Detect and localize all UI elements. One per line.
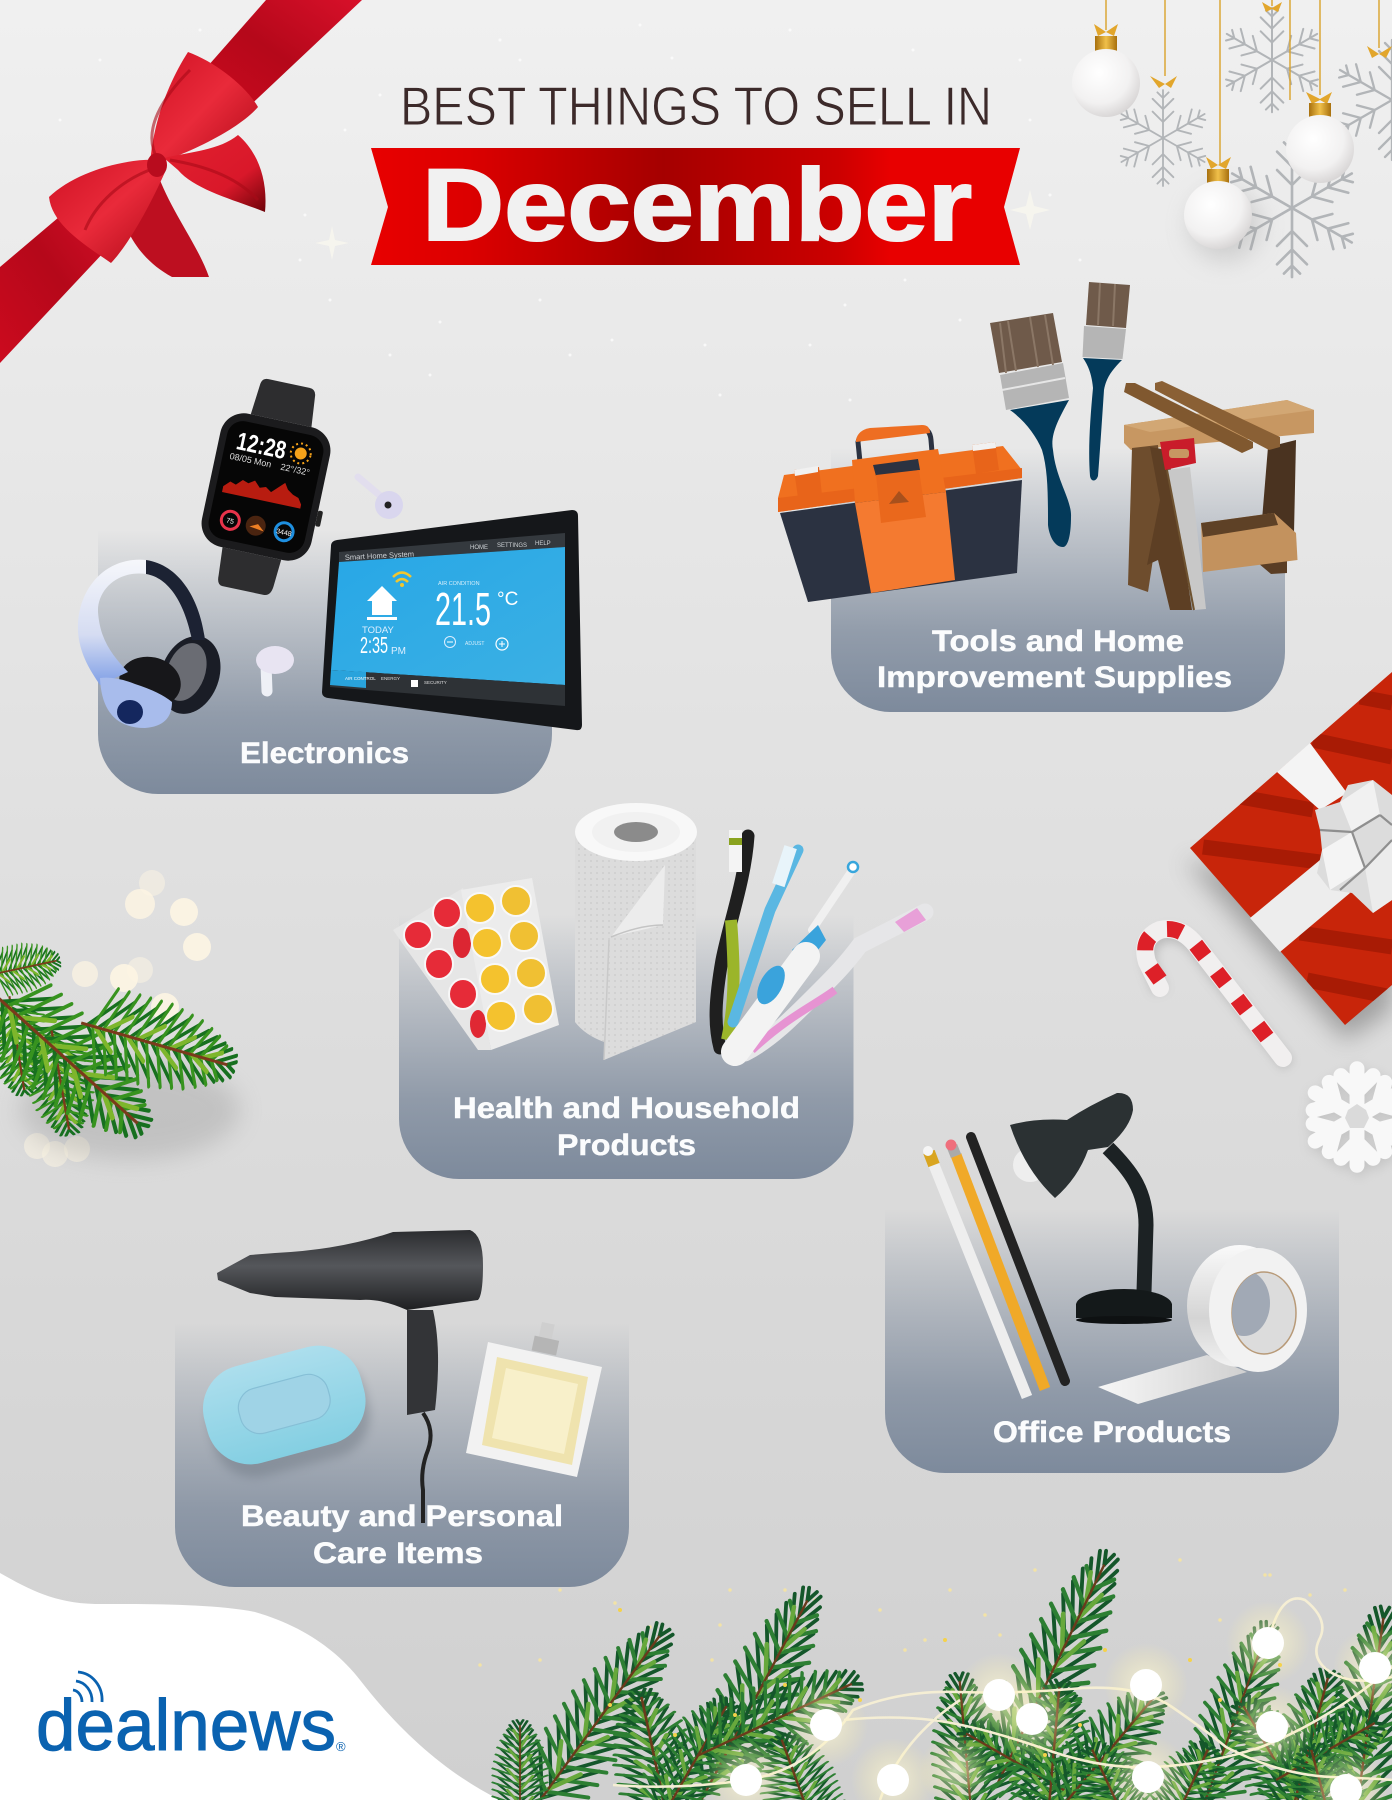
wordmark: dealnews xyxy=(36,1686,336,1766)
icon: tablet xyxy=(322,510,582,730)
brace xyxy=(1201,513,1298,572)
wifi icon xyxy=(393,572,411,582)
lid lip xyxy=(778,468,1022,512)
icon: smartwatch: 75 xyxy=(225,518,235,526)
icon: perfume xyxy=(466,1322,602,1477)
bow tail xyxy=(125,172,209,277)
bow upper loop xyxy=(150,52,258,165)
garland sprigs back xyxy=(506,1537,1392,1800)
card xyxy=(831,448,1285,712)
panel: tools xyxy=(778,282,1314,712)
icon: tablet: 21.5 xyxy=(435,583,491,635)
ornaments xyxy=(1072,0,1392,261)
ribbon band upper xyxy=(200,0,362,115)
label xyxy=(241,1500,563,1570)
bow folds xyxy=(85,70,258,230)
logo: dealnews xyxy=(36,1672,346,1766)
bow right loop xyxy=(164,135,266,212)
strap xyxy=(215,377,319,597)
cane stripes xyxy=(1145,929,1275,1048)
ribbon band lower xyxy=(0,195,120,363)
sparkles: upper xyxy=(60,25,1080,400)
icon: hair dryer xyxy=(217,1230,483,1523)
gift shadow xyxy=(1185,860,1392,1040)
light wires xyxy=(613,1598,1392,1800)
label: Care Items xyxy=(313,1537,483,1570)
saw xyxy=(1167,467,1206,610)
icon: tape xyxy=(1098,1245,1307,1404)
icon: tablet: 2:35 xyxy=(360,632,388,658)
sun xyxy=(294,446,308,461)
icon: headphones xyxy=(78,560,231,728)
icon: tablet: HELP xyxy=(535,541,551,547)
clasp xyxy=(876,470,926,523)
gift ribbon xyxy=(1277,743,1347,810)
icon: small paint brush xyxy=(1082,282,1130,480)
gold bows xyxy=(1094,2,1392,169)
bottom bar xyxy=(330,670,366,688)
branch shadow xyxy=(20,1060,240,1160)
pine branch left xyxy=(0,870,247,1167)
icon: smartwatch xyxy=(189,372,348,603)
snowflake 1 xyxy=(1116,90,1210,186)
icon: tablet: PM xyxy=(391,646,406,657)
top board xyxy=(1124,400,1314,450)
icon: tablet: SECURITY xyxy=(424,680,447,685)
cane body xyxy=(1145,929,1283,1058)
icon: red blister xyxy=(393,888,491,1050)
rails xyxy=(1124,383,1253,453)
icon: tablet: ENERGY xyxy=(381,676,400,681)
panel: health xyxy=(393,803,926,1179)
icon: smartwatch: 08/05 Mon xyxy=(229,451,272,470)
panel: beauty xyxy=(175,1230,629,1587)
ornament 2 xyxy=(1286,103,1354,183)
top bar text: Smart Home System xyxy=(345,549,414,562)
paper snowflake xyxy=(1307,1069,1392,1169)
house icon xyxy=(367,586,397,620)
branch sprigs xyxy=(0,937,247,1163)
label: Beauty and Personal xyxy=(241,1500,563,1533)
card xyxy=(399,915,854,1179)
light bulbs xyxy=(730,1627,1391,1800)
icon: desk lamp xyxy=(1010,1093,1172,1324)
icon: tablet: ADJUST xyxy=(465,641,484,647)
title line: BEST THINGS TO SELL IN xyxy=(400,76,992,137)
left legs xyxy=(1128,445,1162,592)
icon: smartwatch: 12:28 xyxy=(234,427,289,465)
icon: tablet: SETTINGS xyxy=(497,543,527,549)
garland sprigs front xyxy=(493,1646,1392,1800)
snowflake 4 xyxy=(1334,40,1392,160)
registered mark: ® xyxy=(336,1739,346,1754)
gold glints xyxy=(610,1610,1280,1755)
card xyxy=(885,1209,1339,1473)
bow knot xyxy=(147,153,167,177)
icon: earbud top xyxy=(358,477,403,519)
white corner blob xyxy=(0,1573,500,1800)
banner xyxy=(371,148,1020,265)
ornament 3 xyxy=(1184,169,1252,249)
icon: earbud lower xyxy=(256,646,294,691)
icon: soap xyxy=(193,1336,379,1487)
ornament 1 xyxy=(1072,36,1140,117)
sparkle star: upper left xyxy=(315,190,1050,260)
ring 3 xyxy=(273,521,295,542)
label: Tools and Home xyxy=(932,625,1184,658)
handle xyxy=(858,428,932,462)
icon: pencils xyxy=(923,1137,1065,1397)
sparkles: lower xyxy=(480,1560,1345,1700)
box base xyxy=(780,480,1022,602)
chart xyxy=(222,470,305,509)
header band xyxy=(339,533,565,562)
label: Health and Household xyxy=(453,1092,800,1125)
ring 1 xyxy=(220,510,241,531)
icon: toothbrush white pink xyxy=(745,908,926,1053)
icon: smartwatch: 22°/32° xyxy=(280,462,311,478)
signal arcs xyxy=(73,1672,102,1702)
footer band xyxy=(330,670,565,706)
card xyxy=(175,1323,629,1587)
icon: toothbrush blue xyxy=(733,845,798,1022)
icon: tablet: TODAY xyxy=(362,625,395,636)
cane shadow xyxy=(1149,935,1288,1065)
icon: yellow blister xyxy=(461,878,559,1050)
gift box xyxy=(1185,672,1392,1040)
icon: tablet: HOME xyxy=(470,545,488,551)
candy cane xyxy=(1145,929,1288,1065)
title xyxy=(371,76,1020,265)
snowflakes decoration xyxy=(1116,8,1392,277)
icon: toolbox xyxy=(778,425,1022,602)
bokeh lights xyxy=(24,870,211,1167)
ring 2 xyxy=(244,514,268,538)
card xyxy=(98,530,552,794)
lid xyxy=(778,446,1022,512)
snowflake 3 xyxy=(1225,139,1359,277)
icon: smartwatch: 3448 xyxy=(275,528,292,538)
icon: tablet: AIR CONTROL xyxy=(345,676,376,681)
label xyxy=(877,625,1232,694)
ornament shadows xyxy=(1189,189,1261,261)
icon: toothbrush black green xyxy=(716,830,748,1048)
label: Products xyxy=(557,1129,696,1162)
panel: electronics xyxy=(78,372,582,794)
icon: electric toothbrush xyxy=(735,862,858,1052)
panel: office xyxy=(885,1093,1339,1473)
strings xyxy=(1106,0,1379,165)
gift stripes xyxy=(1203,697,1392,997)
right leg xyxy=(1262,440,1296,533)
snowflake 2 xyxy=(1221,8,1323,112)
icon: tablet: °C xyxy=(497,589,518,610)
icon: sawhorse xyxy=(1124,381,1314,610)
label: Office Products xyxy=(993,1416,1231,1449)
gift bow xyxy=(1315,780,1392,913)
label: Improvement Supplies xyxy=(877,661,1232,694)
label: Electronics xyxy=(240,737,409,770)
latches xyxy=(794,467,822,498)
front strap xyxy=(855,492,955,593)
garland xyxy=(493,1537,1392,1800)
bow left loop xyxy=(49,160,165,263)
ribbon and bow xyxy=(0,0,362,363)
label xyxy=(453,1092,800,1162)
gift body xyxy=(1190,672,1392,1025)
icon: paper towel xyxy=(575,803,697,1060)
icon: big paint brush xyxy=(990,313,1071,547)
banner text: December xyxy=(422,148,972,262)
icon: tablet: AIR CONDITION xyxy=(438,581,480,587)
light halos xyxy=(704,1601,1392,1800)
